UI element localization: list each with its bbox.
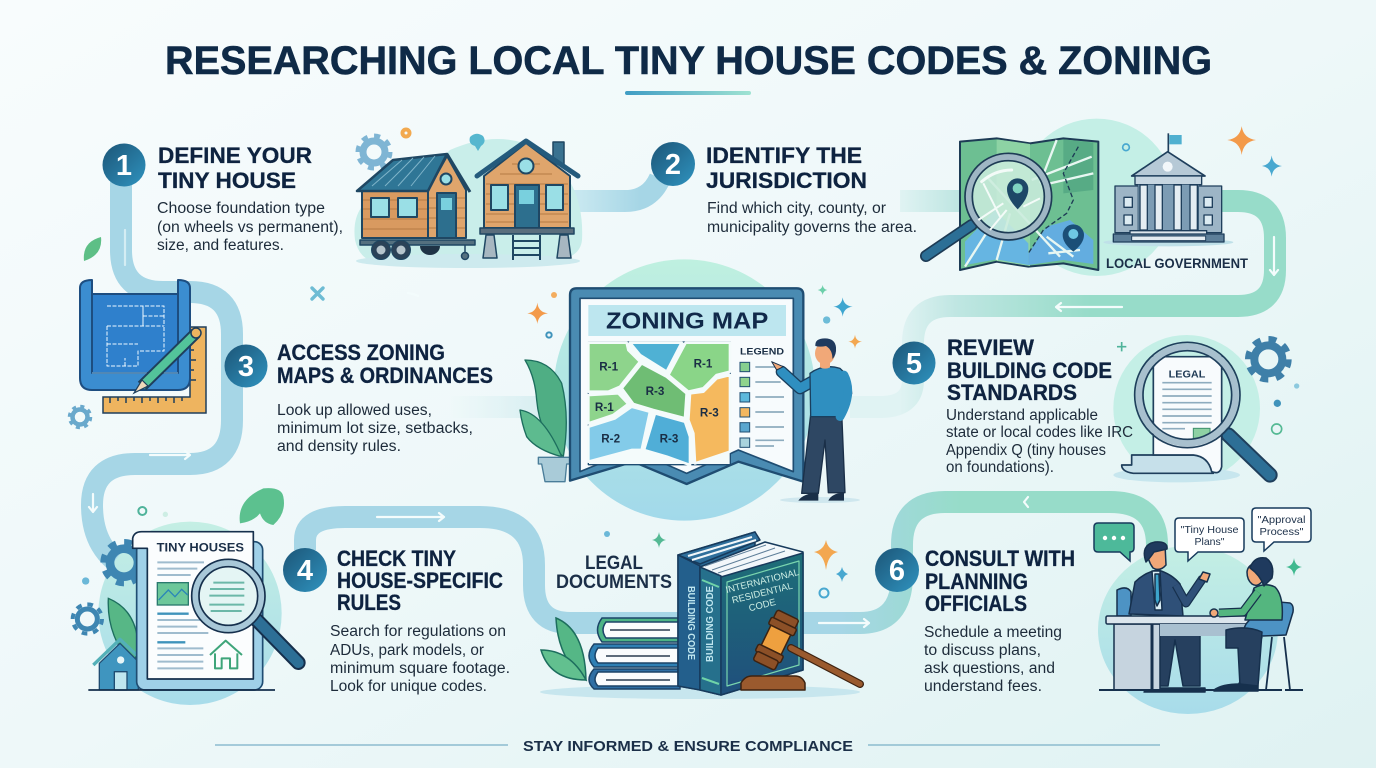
heading 6: CONSULT WITH xyxy=(925,546,1075,571)
heading 3 xyxy=(277,340,493,388)
floor line xyxy=(1099,689,1303,691)
government building xyxy=(1103,133,1233,246)
illustration: legal document under magnifier xyxy=(1113,335,1299,482)
big leaf xyxy=(108,598,138,662)
description 3: minimum lot size, setbacks, xyxy=(277,420,473,437)
description 6: to discuss plans, xyxy=(924,642,1041,659)
badge 3 xyxy=(224,344,268,388)
description 4 xyxy=(330,623,510,695)
description 2 xyxy=(707,200,917,236)
icon: leaf xyxy=(84,237,101,261)
doc heading: TINY HOUSES xyxy=(157,542,244,555)
zoning map illustration xyxy=(520,259,862,521)
speech bubble: tiny house plans: Plans" xyxy=(1194,536,1225,548)
step 2: identify the jurisdiction xyxy=(651,142,917,236)
icon: gear xyxy=(358,136,390,168)
spine and cover text: BUILDING CODE xyxy=(705,586,716,662)
parcel labels: R-3 xyxy=(646,385,665,398)
description 3 xyxy=(277,402,473,455)
illustration: map, magnifier and local government xyxy=(926,119,1282,276)
illustration: meeting with planning officials xyxy=(1094,508,1311,714)
sparkle: orange xyxy=(1227,126,1256,155)
tall green book xyxy=(700,542,803,695)
illustration: tiny houses xyxy=(354,130,582,268)
doc label: LEGAL xyxy=(1169,369,1205,380)
trailer tiny house xyxy=(357,154,475,260)
step 4: check tiny house-specific rules xyxy=(283,546,510,695)
speech bubble: tiny house plans xyxy=(1175,518,1244,561)
legend: LEGEND xyxy=(740,346,784,356)
spine and cover text: BUILDING CODE xyxy=(685,586,696,660)
stacked books xyxy=(589,618,680,689)
speech bubble: tiny house plans: "Tiny House xyxy=(1180,524,1239,536)
badge 2 xyxy=(651,142,695,186)
title: RESEARCHING LOCAL TINY HOUSE CODES & ZONING xyxy=(165,39,1212,83)
document back panel xyxy=(137,542,263,690)
footer tagline: STAY INFORMED & ENSURE COMPLIANCE xyxy=(523,738,853,755)
description 6: ask questions, and xyxy=(924,660,1055,677)
description 5: Understand applicable xyxy=(946,407,1098,424)
gavel xyxy=(741,609,860,690)
magnifier xyxy=(1135,342,1270,475)
document paper xyxy=(133,532,253,679)
zoning parcels xyxy=(588,342,730,465)
dots xyxy=(82,507,168,585)
spine and cover text: RESIDENTIAL xyxy=(731,581,794,606)
small blue house xyxy=(93,639,140,690)
description 6 xyxy=(924,624,1062,695)
ruler xyxy=(103,327,206,413)
speech bubble: approval process xyxy=(1252,508,1311,551)
document xyxy=(1153,357,1222,473)
description 5: state or local codes like IRC xyxy=(946,424,1133,441)
description 1: Choose foundation type xyxy=(157,200,325,217)
speech bubble: approval process: Process" xyxy=(1260,526,1304,538)
description 6: understand fees. xyxy=(924,678,1042,695)
description 4: Look for unique codes. xyxy=(330,678,487,695)
heading 2: JURISDICTION xyxy=(706,168,867,193)
badge 6: 6 xyxy=(889,555,905,587)
route direction arrows xyxy=(89,230,1278,627)
badge 4 xyxy=(283,548,327,592)
spine and cover text: CODE xyxy=(748,597,777,614)
winding route path xyxy=(92,170,1275,623)
badge 2: 2 xyxy=(665,149,681,181)
heading 3: ACCESS ZONING xyxy=(277,340,445,365)
heading 3: MAPS & ORDINANCES xyxy=(277,363,493,388)
zoning title band xyxy=(588,305,786,336)
heading: zoning map: ZONING MAP xyxy=(606,307,768,333)
doc chart thumbnail xyxy=(157,583,188,605)
step 6: consult with planning officials xyxy=(875,546,1075,695)
small plant leaves xyxy=(541,618,586,680)
legend xyxy=(740,346,784,447)
speech bubble: approval process: "Approval xyxy=(1258,514,1306,526)
desk xyxy=(1106,616,1249,690)
heading 6: OFFICIALS xyxy=(925,591,1027,616)
description 3: and density rules. xyxy=(277,438,401,455)
description 2: municipality governs the area. xyxy=(707,219,917,236)
heading 2: IDENTIFY THE xyxy=(706,143,862,168)
blueprint sheet xyxy=(80,280,190,390)
icon: teal cross xyxy=(312,288,323,299)
magnifying glass xyxy=(926,153,1052,256)
heading 2 xyxy=(706,143,867,193)
step 3: access zoning maps and ordinances xyxy=(224,340,493,455)
illustration: tiny house regulations document xyxy=(73,488,298,705)
description 6: Schedule a meeting xyxy=(924,624,1062,641)
raised permanent tiny house xyxy=(477,141,578,260)
presenter figure xyxy=(772,338,860,503)
heading 5: STANDARDS xyxy=(947,380,1077,405)
description 1: size, and features. xyxy=(157,237,284,254)
sparkle xyxy=(1286,558,1302,576)
description 5 xyxy=(946,407,1133,476)
gear xyxy=(1248,339,1289,380)
badge 5: 5 xyxy=(906,348,922,380)
heading 4: CHECK TINY xyxy=(337,546,456,571)
description 4: Search for regulations on xyxy=(330,623,506,640)
badge 6 xyxy=(875,548,919,592)
heading 1 xyxy=(158,143,312,193)
icon: small gear xyxy=(70,406,90,428)
parcel labels xyxy=(595,357,719,446)
heading 4 xyxy=(337,546,503,615)
heading 5: REVIEW xyxy=(947,335,1034,360)
doc text lines xyxy=(157,562,208,668)
title underline xyxy=(625,91,751,95)
description 1 xyxy=(157,200,343,254)
visitor in green xyxy=(1210,558,1293,691)
label: legal documents: DOCUMENTS xyxy=(556,572,672,593)
heading 1: TINY HOUSE xyxy=(158,168,296,193)
heading 1: DEFINE YOUR xyxy=(158,143,312,168)
gears xyxy=(73,542,145,634)
ground line xyxy=(88,687,275,692)
badge 1: 1 xyxy=(116,150,132,182)
parcel labels: R-1 xyxy=(595,401,614,414)
step 1: define your tiny house xyxy=(102,143,343,254)
sparkle: blue xyxy=(1262,155,1282,177)
parcel labels: R-1 xyxy=(694,357,713,370)
folded map xyxy=(960,138,1098,270)
sparkles and dots xyxy=(527,285,862,349)
heading 5 xyxy=(947,335,1112,405)
badge 1 xyxy=(102,144,146,186)
sparkles xyxy=(604,531,848,598)
label: legal documents xyxy=(556,553,672,593)
small green house xyxy=(210,641,242,668)
icon: small orange gear xyxy=(402,130,410,136)
dots and sparkle xyxy=(1117,342,1299,434)
pencil xyxy=(134,328,201,393)
description 4: ADUs, park models, or xyxy=(330,642,484,659)
tall blue book xyxy=(678,532,760,690)
badge 5 xyxy=(892,342,936,384)
badge 3: 3 xyxy=(238,351,254,383)
map board frame xyxy=(570,288,803,484)
illustration: law books and gavel xyxy=(540,531,860,699)
heading 4: RULES xyxy=(337,590,401,615)
icon: small teal badge xyxy=(470,134,485,151)
label: legal documents: LEGAL xyxy=(585,553,643,574)
potted plant xyxy=(520,360,570,482)
label: local government: LOCAL GOVERNMENT xyxy=(1106,256,1249,271)
scroll base xyxy=(1122,455,1213,473)
description 3: Look up allowed uses, xyxy=(277,402,432,419)
magnifier xyxy=(192,559,298,663)
map board paper xyxy=(580,298,793,473)
spine and cover text: INTERNATIONAL xyxy=(725,567,800,596)
small ring xyxy=(1123,144,1129,151)
chat bubble: green xyxy=(1094,523,1134,561)
description 5: on foundations). xyxy=(946,459,1054,476)
spine and cover text xyxy=(685,567,800,662)
parcel labels: R-3 xyxy=(700,407,719,420)
heading 4: HOUSE-SPECIFIC xyxy=(337,568,503,593)
heading 6 xyxy=(925,546,1075,616)
step 5: review building code standards xyxy=(892,335,1133,476)
description 2: Find which city, county, or xyxy=(707,200,886,217)
parcel labels: R-2 xyxy=(601,433,621,446)
badge 4: 4 xyxy=(297,555,313,587)
official at desk xyxy=(1117,542,1210,692)
illustration: blueprint and ruler xyxy=(70,280,206,428)
floating leaf xyxy=(240,488,284,525)
parcel labels: R-1 xyxy=(599,361,619,374)
parcel labels: R-3 xyxy=(660,433,679,446)
description 1: (on wheels vs permanent), xyxy=(157,219,343,236)
heading 6: PLANNING xyxy=(925,569,1028,594)
heading 5: BUILDING CODE xyxy=(947,358,1112,383)
description 4: minimum square footage. xyxy=(330,660,510,677)
map pin xyxy=(1063,224,1084,252)
description 5: Appendix Q (tiny houses xyxy=(946,442,1106,459)
